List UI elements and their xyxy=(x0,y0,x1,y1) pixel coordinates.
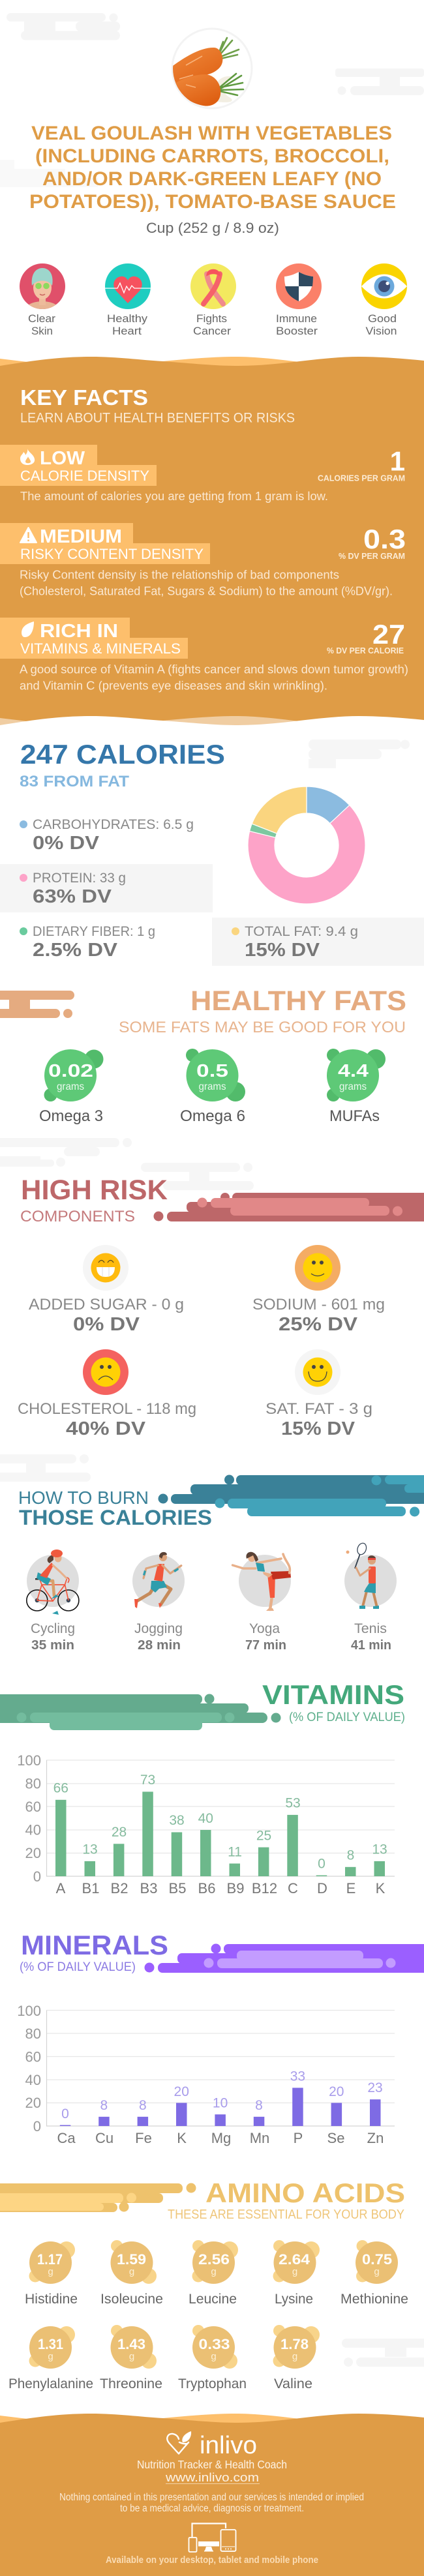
bar chart: vitamins: 13 xyxy=(372,1842,387,1857)
label: clear skin xyxy=(28,312,55,337)
item: saturated fat xyxy=(265,1349,372,1439)
subheading: key facts: LEARN ABOUT HEALTH BENEFITS OR RISKS xyxy=(20,411,295,425)
bar chart: minerals: Mg xyxy=(211,2130,231,2146)
amino: tryptophan: g xyxy=(211,2351,217,2362)
heading: amino acids: AMINO ACIDS xyxy=(205,2178,405,2208)
amino: valine: g xyxy=(292,2351,297,2362)
item: sodium: 25% DV xyxy=(279,1314,358,1335)
icon: immune booster shield xyxy=(276,263,322,309)
fact: medium risky content density xyxy=(0,523,406,597)
bar chart: vitamins: 66 xyxy=(53,1780,68,1796)
disclaimer: to be a medical advice, diagnosis or treatment. xyxy=(120,2503,304,2514)
stat: total fat: TOTAL FAT: 9.4 g xyxy=(245,924,358,939)
amino: threonine xyxy=(100,2325,162,2391)
health benefits row xyxy=(20,263,407,337)
bar chart: vitamins: B3 xyxy=(140,1880,157,1896)
decoration: burn swoosh xyxy=(158,1475,424,1517)
amino: methionine xyxy=(341,2240,408,2307)
panel: high risk components xyxy=(18,1175,424,1439)
icon: fights cancer ribbon xyxy=(190,263,236,309)
stat: dietary fiber: 2.5% DV xyxy=(33,940,118,961)
label: immune booster: Immune xyxy=(276,312,317,325)
stat: total fat xyxy=(212,918,424,966)
disclaimer xyxy=(59,2492,364,2514)
label: yoga xyxy=(245,1621,286,1653)
amino: leucine: g xyxy=(211,2266,217,2277)
item: added sugar: 0% DV xyxy=(73,1314,140,1335)
stat: carbohydrates: 0% DV xyxy=(33,833,100,854)
activity: jogging xyxy=(132,1552,185,1608)
label: clear skin: Skin xyxy=(31,325,53,337)
amino: tryptophan xyxy=(178,2325,247,2391)
website link: www.inlivo.com xyxy=(165,2471,259,2484)
decoration: fats swoosh xyxy=(0,991,74,1018)
bar chart: vitamins: E xyxy=(346,1880,356,1896)
fact: low calorie density: 1 xyxy=(390,446,405,476)
cloud decoration xyxy=(309,740,410,768)
bar chart: minerals: 0 xyxy=(33,2118,41,2134)
metric: mufas: grams xyxy=(339,1081,367,1092)
bar chart: vitamins: 0 xyxy=(318,1856,326,1872)
fact: rich in vitamins and minerals: RICH IN xyxy=(40,621,118,642)
label: yoga: 77 min xyxy=(245,1638,286,1653)
amino: valine: 1.78 xyxy=(280,2336,309,2352)
heading: vitamins: VITAMINS xyxy=(262,1679,404,1710)
amino: tryptophan: 0.33 xyxy=(198,2336,230,2352)
decoration: amino swoosh xyxy=(0,2183,196,2212)
bar chart: vitamins: 20 xyxy=(25,1845,41,1861)
metric: omega 3: grams xyxy=(57,1081,84,1092)
heading: calories: 247 CALORIES xyxy=(20,739,225,770)
fact: rich in vitamins and minerals: % DV PER CALORIE xyxy=(327,646,404,655)
panel: calories xyxy=(0,739,424,966)
bar chart: vitamins: B9 xyxy=(227,1880,244,1896)
bar chart: minerals: 8 xyxy=(100,2098,108,2113)
bar chart: vitamins: 0 xyxy=(33,1868,41,1885)
logo: inlivo xyxy=(167,2431,257,2459)
activity: cycling xyxy=(27,1550,79,1615)
panel: amino acids xyxy=(0,2178,424,2391)
background cloud amino xyxy=(342,2339,424,2367)
fact: low calorie density: LOW xyxy=(40,448,85,469)
background clouds middle xyxy=(0,1138,254,1190)
label: tenis: 41 min xyxy=(351,1638,391,1653)
amino: lysine: 2.64 xyxy=(279,2251,310,2268)
label: fights cancer: Cancer xyxy=(193,325,231,337)
decoration: minerals swoosh xyxy=(145,1943,424,1973)
bar chart: minerals: 20 xyxy=(174,2084,189,2099)
bar chart: vitamins: K xyxy=(376,1880,386,1896)
bar chart: minerals: 20 xyxy=(25,2095,41,2111)
activity: tennis xyxy=(344,1542,397,1609)
subheading: amino acids: THESE ARE ESSENTIAL FOR YOUR BODY xyxy=(168,2208,404,2222)
metric: omega 3: Omega 3 xyxy=(39,1107,103,1125)
amino: leucine xyxy=(189,2240,238,2307)
item: saturated fat: 15% DV xyxy=(281,1418,356,1439)
fact: low calorie density: CALORIES PER GRAM xyxy=(318,473,405,483)
title: VEAL GOULASH WITH VEGETABLES xyxy=(31,123,392,144)
bar chart: vitamins: 100 xyxy=(17,1752,41,1769)
amino: histidine: 1.17 xyxy=(37,2251,63,2268)
label: jogging: Jogging xyxy=(134,1621,183,1636)
amino: leucine: 2.56 xyxy=(198,2251,230,2268)
amino: tryptophan: Tryptophan xyxy=(178,2376,247,2391)
amino: phenylalanine: 1.31 xyxy=(38,2336,63,2352)
bar chart: vitamins: 40 xyxy=(198,1811,213,1826)
stat: dietary fiber: DIETARY FIBER: 1 g xyxy=(33,924,155,939)
metric: mufas: MUFAs xyxy=(329,1107,380,1125)
metric: omega 6: Omega 6 xyxy=(180,1107,245,1125)
fact: medium risky content density: Risky Content density is the relationship of bad components xyxy=(20,569,339,582)
amino: histidine xyxy=(25,2241,78,2307)
amino: threonine: 1.43 xyxy=(117,2336,145,2352)
bar chart: vitamins xyxy=(17,1752,395,1896)
label: cycling xyxy=(31,1621,75,1653)
amino: lysine: g xyxy=(292,2266,297,2277)
item: added sugar xyxy=(29,1245,184,1335)
subheading: healthy fats: SOME FATS MAY BE GOOD FOR YOU xyxy=(119,1019,406,1036)
fact: medium risky content density: (Cholesterol, Saturated Fat, Sugars & Sodium) to the amount (%DV/gr). xyxy=(20,584,393,597)
amino: phenylalanine xyxy=(8,2326,93,2391)
title: POTATOES)), TOMATO-BASE SAUCE xyxy=(29,191,396,213)
bar chart: minerals: 8 xyxy=(139,2098,147,2113)
bar chart: vitamins: 80 xyxy=(25,1775,41,1792)
bar chart: vitamins: B5 xyxy=(169,1880,186,1896)
bar chart: minerals: Se xyxy=(327,2130,344,2146)
item: cholesterol: CHOLESTEROL - 118 mg xyxy=(18,1400,196,1418)
bar chart: vitamins: 60 xyxy=(25,1799,41,1815)
heading: high risk: HIGH RISK xyxy=(21,1175,168,1206)
fact: rich in vitamins and minerals xyxy=(0,618,408,693)
item: sodium xyxy=(252,1245,385,1335)
decoration: high risk swoosh xyxy=(154,1193,424,1221)
metric: mufas xyxy=(327,1049,386,1125)
label: immune booster: Booster xyxy=(276,325,318,337)
amino: threonine: Threonine xyxy=(100,2376,162,2391)
label: good vision: Vision xyxy=(365,325,397,337)
availability note: Available on your desktop, tablet and mobile phone xyxy=(106,2554,318,2566)
bar chart: vitamins: 8 xyxy=(347,1848,354,1863)
logo: inlivo: inlivo xyxy=(200,2432,257,2459)
amino: methionine: 0.75 xyxy=(362,2251,392,2268)
amino: phenylalanine: g xyxy=(48,2351,53,2362)
panel: minerals xyxy=(17,1930,424,2146)
title: (INCLUDING CARROTS, BROCCOLI, xyxy=(35,145,389,167)
bar chart: vitamins: B1 xyxy=(82,1880,99,1896)
food image: carrots xyxy=(171,29,252,108)
heading: minerals: MINERALS xyxy=(21,1930,168,1960)
fact: medium risky content density: 0.3 xyxy=(363,524,406,554)
item: cholesterol: 40% DV xyxy=(66,1418,146,1439)
subheading: components: COMPONENTS xyxy=(20,1208,135,1225)
amino: phenylalanine: Phenylalanine xyxy=(8,2376,93,2391)
bar chart: vitamins: B12 xyxy=(252,1880,277,1896)
donut chart xyxy=(248,786,365,904)
subheading: from fat: 83 FROM FAT xyxy=(20,773,129,790)
amino: isoleucine xyxy=(100,2240,163,2307)
label: tenis xyxy=(351,1621,391,1653)
title: AND/OR DARK-GREEN LEAFY (NO xyxy=(42,168,382,190)
metric: omega 3: 0.02 xyxy=(48,1060,93,1081)
heading: key facts: KEY FACTS xyxy=(20,385,148,410)
item: saturated fat: SAT. FAT - 3 g xyxy=(265,1400,372,1418)
metric: omega 6: 0.5 xyxy=(196,1060,228,1081)
bar chart: minerals: P xyxy=(294,2130,303,2146)
panel: vitamins xyxy=(0,1679,405,1896)
label: good vision: Good xyxy=(368,312,397,325)
bar chart: vitamins: C xyxy=(288,1880,298,1896)
fact: medium risky content density: % DV PER GRAM xyxy=(339,551,405,561)
amino: histidine: g xyxy=(48,2266,53,2277)
amino: isoleucine: 1.59 xyxy=(117,2251,146,2268)
bar chart: minerals: 33 xyxy=(290,2069,305,2084)
metric: omega 6: grams xyxy=(198,1081,226,1092)
label: good vision xyxy=(365,312,397,337)
metric: mufas: 4.4 xyxy=(338,1060,369,1081)
label: yoga: Yoga xyxy=(249,1621,280,1636)
fact: low calorie density: CALORIE DENSITY xyxy=(20,468,149,484)
stat: carbohydrates: CARBOHYDRATES: 6.5 g xyxy=(33,817,194,832)
bar chart: minerals xyxy=(17,2003,395,2146)
icon: devices xyxy=(189,2524,236,2552)
activity: yoga xyxy=(232,1552,291,1611)
bar chart: vitamins: A xyxy=(56,1880,66,1896)
amino: isoleucine: Isoleucine xyxy=(100,2292,163,2307)
amino: valine: Valine xyxy=(274,2376,312,2391)
fact: rich in vitamins and minerals: 27 xyxy=(372,619,405,650)
label: fights cancer xyxy=(193,312,231,337)
label: cycling: Cycling xyxy=(31,1621,75,1636)
subheading: vitamins: (% OF DAILY VALUE) xyxy=(289,1711,405,1724)
bar chart: minerals: 100 xyxy=(17,2003,41,2019)
bar chart: minerals: 10 xyxy=(213,2096,228,2110)
stat: protein xyxy=(0,864,213,912)
item: cholesterol xyxy=(18,1349,196,1439)
item: added sugar: ADDED SUGAR - 0 g xyxy=(29,1296,184,1313)
background cloud burn xyxy=(0,1454,91,1482)
metric: omega 6 xyxy=(180,1049,245,1125)
bar chart: minerals: K xyxy=(177,2130,187,2146)
bar chart: vitamins: 25 xyxy=(256,1829,271,1843)
icon: good vision eye xyxy=(361,263,407,309)
bar chart: minerals: Mn xyxy=(250,2130,269,2146)
bar chart: minerals: 8 xyxy=(255,2098,263,2113)
tagline: Nutrition Tracker & Health Coach xyxy=(137,2458,287,2471)
bar chart: minerals: Zn xyxy=(367,2130,384,2146)
amino: isoleucine: g xyxy=(129,2266,134,2277)
fact: rich in vitamins and minerals: A good source of Vitamin A (fights cancer and slows down tumor growth) xyxy=(20,663,408,676)
subheading: minerals: (% OF DAILY VALUE) xyxy=(20,1960,136,1974)
bar chart: minerals: 80 xyxy=(25,2026,41,2042)
fact: low calorie density: The amount of calories you are getting from 1 gram is low. xyxy=(20,490,328,503)
serving size: Cup (252 g / 8.9 oz) xyxy=(146,220,279,236)
disclaimer: Nothing contained in this presentation and our services is intended or implied xyxy=(59,2492,364,2503)
bar chart: vitamins: 28 xyxy=(112,1825,127,1840)
amino: methionine: g xyxy=(374,2266,380,2277)
label: healthy heart: Heart xyxy=(112,325,142,337)
stat: protein: 63% DV xyxy=(33,886,112,907)
label: immune booster xyxy=(276,312,318,337)
panel: healthy fats xyxy=(0,985,406,1125)
amino: lysine xyxy=(273,2240,320,2307)
decoration: vitamins swoosh xyxy=(0,1694,280,1730)
bar chart: minerals: Fe xyxy=(135,2130,152,2146)
bar chart: minerals: 60 xyxy=(25,2049,41,2065)
label: fights cancer: Fights xyxy=(196,312,227,325)
icon: clear skin xyxy=(20,263,65,309)
panel: footer xyxy=(0,2414,424,2576)
bar chart: vitamins: 53 xyxy=(285,1796,301,1810)
background clouds top xyxy=(0,13,424,187)
fact: medium risky content density: RISKY CONTENT DENSITY xyxy=(20,546,204,562)
fact: rich in vitamins and minerals: VITAMINS & MINERALS xyxy=(20,640,181,657)
bar chart: vitamins: B2 xyxy=(111,1880,128,1896)
amino: threonine: g xyxy=(129,2351,134,2362)
label: healthy heart xyxy=(107,312,148,337)
bar chart: vitamins: 38 xyxy=(169,1813,185,1828)
panel: key facts xyxy=(0,357,424,734)
amino: valine xyxy=(273,2325,320,2391)
stat: protein: PROTEIN: 33 g xyxy=(33,871,126,886)
metric: omega 3 xyxy=(39,1049,103,1125)
amino: methionine: Methionine xyxy=(341,2292,408,2307)
bar chart: vitamins: 40 xyxy=(25,1822,41,1838)
bar chart: vitamins: 73 xyxy=(140,1773,155,1788)
bar chart: minerals: 20 xyxy=(329,2084,344,2099)
label: tenis: Tenis xyxy=(354,1621,387,1636)
fact: medium risky content density: MEDIUM xyxy=(40,526,122,547)
bar chart: vitamins: 11 xyxy=(228,1844,242,1860)
heading: how to burn: HOW TO BURN xyxy=(18,1488,149,1508)
amino: histidine: Histidine xyxy=(25,2292,78,2307)
bar chart: minerals: 23 xyxy=(367,2080,383,2095)
item: sodium: SODIUM - 601 mg xyxy=(252,1296,385,1313)
bar chart: vitamins: 13 xyxy=(82,1842,98,1857)
icon: healthy heart xyxy=(105,263,151,309)
label: jogging xyxy=(134,1621,183,1653)
fact: low calorie density xyxy=(0,445,405,503)
heading: those calories: THOSE CALORIES xyxy=(19,1506,212,1529)
label: cycling: 35 min xyxy=(31,1638,74,1653)
title xyxy=(29,123,396,213)
bar chart: minerals: Ca xyxy=(57,2130,76,2146)
heading: healthy fats: HEALTHY FATS xyxy=(190,985,406,1017)
label: healthy heart: Healthy xyxy=(107,312,148,325)
bar chart: minerals: 40 xyxy=(25,2072,41,2088)
bar chart: minerals: Cu xyxy=(95,2130,114,2146)
bar chart: vitamins: D xyxy=(317,1880,327,1896)
fact: rich in vitamins and minerals: and Vitamin C (prevents eye diseases and skin wrinkling). xyxy=(20,680,327,693)
stat: carbohydrates xyxy=(20,817,194,854)
panel: how to burn calories xyxy=(18,1475,424,1653)
amino: lysine: Lysine xyxy=(275,2292,313,2307)
label: jogging: 28 min xyxy=(138,1638,181,1653)
bar chart: vitamins: B6 xyxy=(198,1880,215,1896)
stat: total fat: 15% DV xyxy=(245,940,320,961)
stat: dietary fiber xyxy=(20,924,155,961)
amino: leucine: Leucine xyxy=(189,2292,237,2307)
bar chart: minerals: 0 xyxy=(61,2106,69,2121)
label: clear skin: Clear xyxy=(28,312,55,325)
